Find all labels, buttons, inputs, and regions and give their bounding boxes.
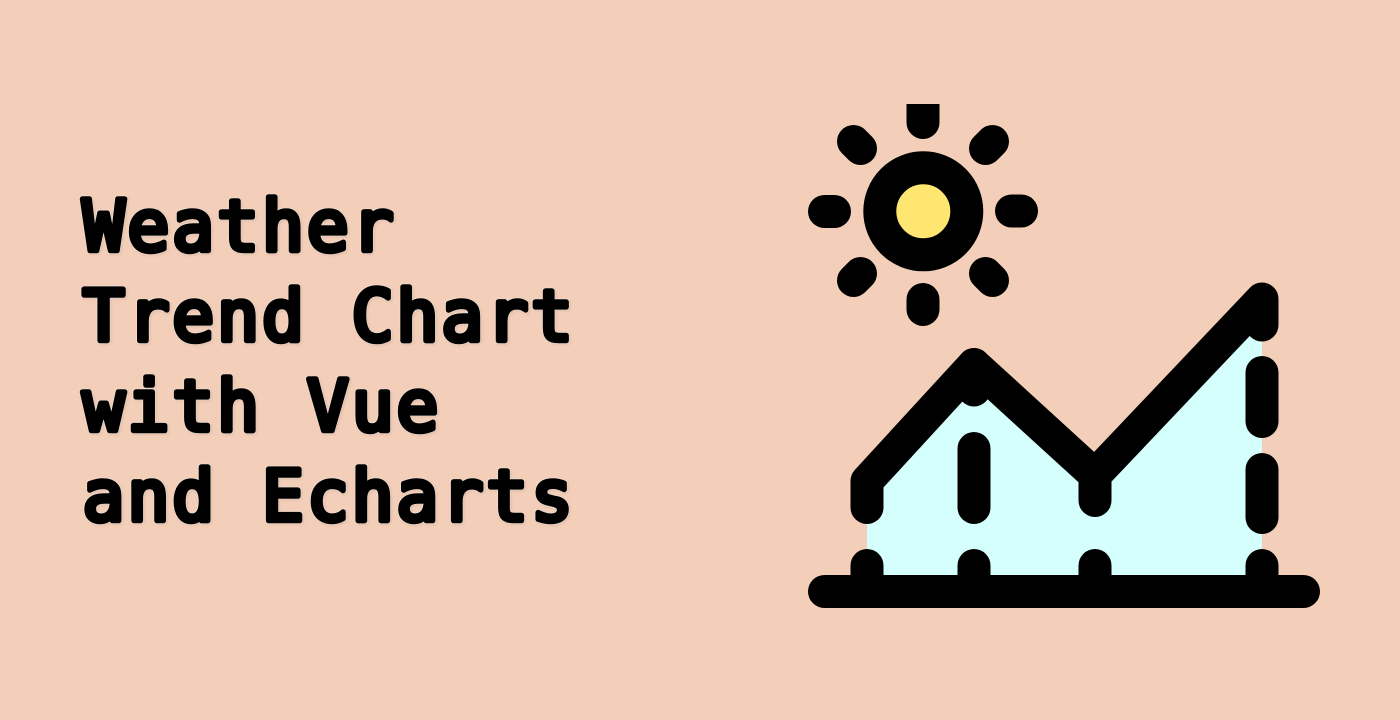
icon: sun	[824, 104, 1022, 310]
title	[82, 186, 576, 538]
title: and Echarts	[82, 456, 576, 538]
icon: area chart	[824, 299, 1304, 592]
title: Weather	[82, 186, 396, 268]
title: with Vue	[82, 366, 441, 448]
trend line	[867, 299, 1262, 508]
sun rays	[824, 104, 1022, 310]
drop lines	[867, 364, 1262, 591]
baseline	[824, 575, 1304, 608]
title: Trend Chart	[82, 276, 576, 358]
sun core	[880, 168, 967, 255]
chart area fill	[867, 299, 1262, 592]
